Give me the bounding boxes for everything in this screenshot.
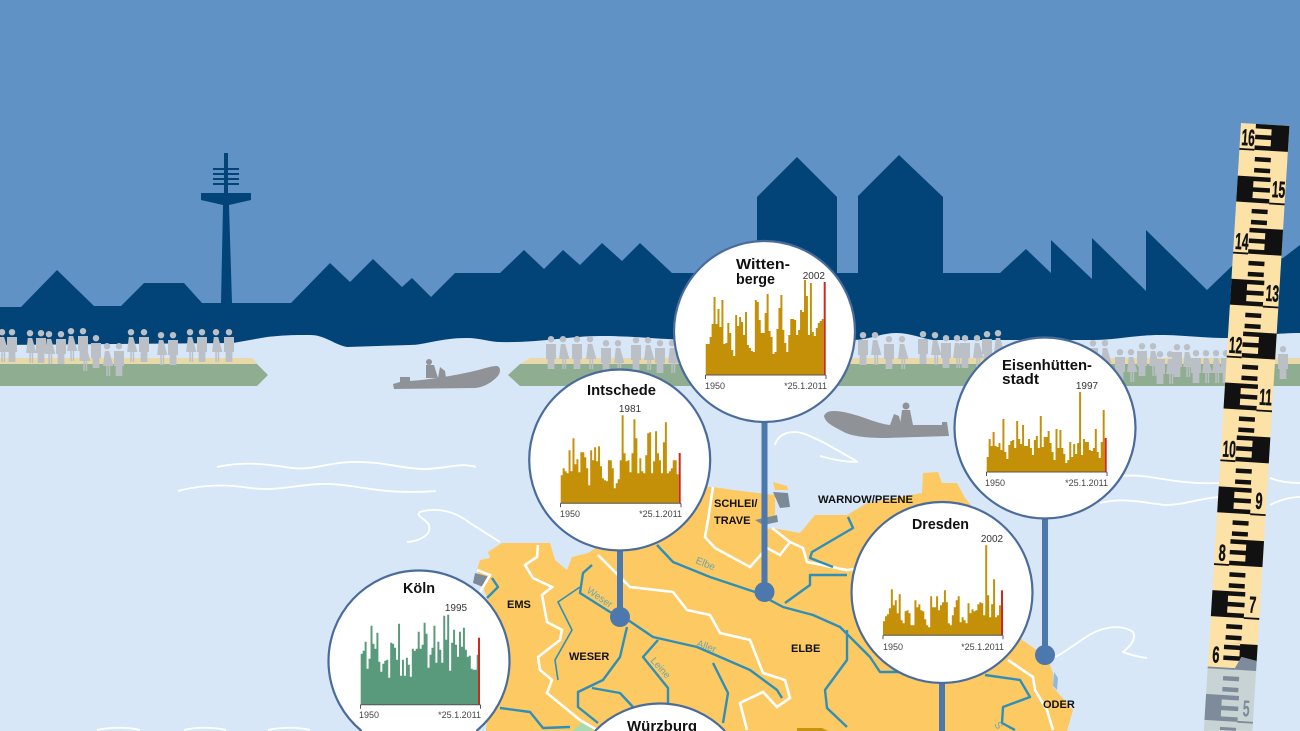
left river bank xyxy=(0,358,268,386)
city skyline silhouette xyxy=(0,153,1300,347)
map: basin name labels: EMS xyxy=(507,599,531,611)
right river bank xyxy=(508,358,1300,386)
gauge: dry section: 11 xyxy=(1259,383,1273,410)
map: river name labels xyxy=(584,556,1004,731)
icon: rescue boat right xyxy=(824,402,949,438)
map: river name labels: Weser xyxy=(584,585,615,611)
map: basin name labels xyxy=(507,494,1075,711)
chart circle: Dresden: *25.1.2011 xyxy=(961,642,1004,652)
chart circle: Dresden: Dresden xyxy=(912,516,969,533)
chart circle: Eisenhüttenstadt: 1997 xyxy=(1076,381,1099,392)
chart circle: Köln: 1995 xyxy=(445,603,468,614)
gauge: dry section: 16 xyxy=(1241,124,1256,151)
chart circle: Köln: *25.1.2011 xyxy=(438,710,481,720)
chart circle: Dresden: 2002 xyxy=(981,534,1004,545)
map: river name labels: Aller xyxy=(695,638,718,656)
gauge: dry section: 10 xyxy=(1222,435,1237,462)
gauge: dry section: 8 xyxy=(1218,539,1227,566)
map: basin name labels: ODER xyxy=(1043,699,1075,711)
crowd on the centre bank xyxy=(546,330,1004,373)
icon: rescue boat left xyxy=(393,359,500,389)
chart circle: Wittenberge: 1950 xyxy=(705,381,725,391)
waves on the water xyxy=(97,432,1300,730)
chart circle: Wittenberge: 2002 xyxy=(803,271,825,282)
map: rivers xyxy=(487,517,1030,730)
pin lines and location dots xyxy=(610,420,1055,731)
map: river basin borders xyxy=(477,487,1053,730)
chart circle: Intschede: *25.1.2011 xyxy=(639,509,682,519)
chart circle: Wittenberge: Witten- xyxy=(736,256,790,273)
map: basin name labels: TRAVE xyxy=(714,515,750,527)
map: coastal water shading and islands xyxy=(473,482,1058,731)
chart circle: Köln: 1950 xyxy=(359,710,379,720)
chart circle: Intschede xyxy=(529,370,710,550)
water level gauge xyxy=(1204,123,1289,731)
gauge: submerged section xyxy=(1204,655,1257,731)
crowd on the left bank xyxy=(0,328,234,376)
gauge: dry section: 6 xyxy=(1212,641,1220,668)
gauge: dry section xyxy=(1208,123,1289,671)
map: basin name labels: ELBE xyxy=(791,643,820,655)
map: basin name labels: SCHLEI/ xyxy=(714,498,757,510)
chart circle: Köln: Köln xyxy=(403,580,435,597)
chart circle: Intschede: 1981 xyxy=(619,404,642,415)
map: river name labels: S xyxy=(991,720,1004,731)
map of Germany: land xyxy=(477,472,1073,731)
chart circle: Intschede: 1950 xyxy=(560,509,580,519)
gauge: dry section: 13 xyxy=(1265,280,1280,307)
chart circle: Eisenhüttenstadt xyxy=(954,338,1136,518)
water background xyxy=(0,330,1300,731)
chart circle: Eisenhüttenstadt: stadt xyxy=(1002,371,1039,388)
chart circle: Dresden xyxy=(852,502,1032,683)
map: basin name labels: WARNOW/PEENE xyxy=(818,494,913,506)
chart circle: Eisenhüttenstadt: *25.1.2011 xyxy=(1065,478,1108,488)
map: river name labels: Leine xyxy=(648,656,673,682)
chart circle: Eisenhüttenstadt: Eisenhütten- xyxy=(1002,357,1092,374)
gauge: dry section: 9 xyxy=(1255,488,1263,514)
gauge: dry section: 15 xyxy=(1271,176,1286,203)
gauge: dry section: 12 xyxy=(1228,331,1243,358)
chart circle: Würzburg xyxy=(595,703,725,731)
gauge: dry section: 14 xyxy=(1234,228,1250,255)
chart circle: Wittenberge: berge xyxy=(736,271,775,288)
chart circle: Köln xyxy=(329,571,510,731)
map: basin name labels: WESER xyxy=(569,651,609,663)
chart circle: Eisenhüttenstadt: 1950 xyxy=(985,478,1005,488)
chart circle: Intschede: Intschede xyxy=(587,382,656,399)
chart circle: Wittenberge: *25.1.2011 xyxy=(784,381,827,391)
map: river name labels: Elbe xyxy=(694,556,717,573)
gauge: submerged section: 5 xyxy=(1242,695,1251,722)
gauge: dry section: 7 xyxy=(1248,591,1257,618)
chart circle: Wittenberge xyxy=(674,241,855,422)
sky background xyxy=(0,0,1300,345)
crowd on the right bank xyxy=(1088,340,1288,384)
chart circle: Dresden: 1950 xyxy=(883,642,903,652)
